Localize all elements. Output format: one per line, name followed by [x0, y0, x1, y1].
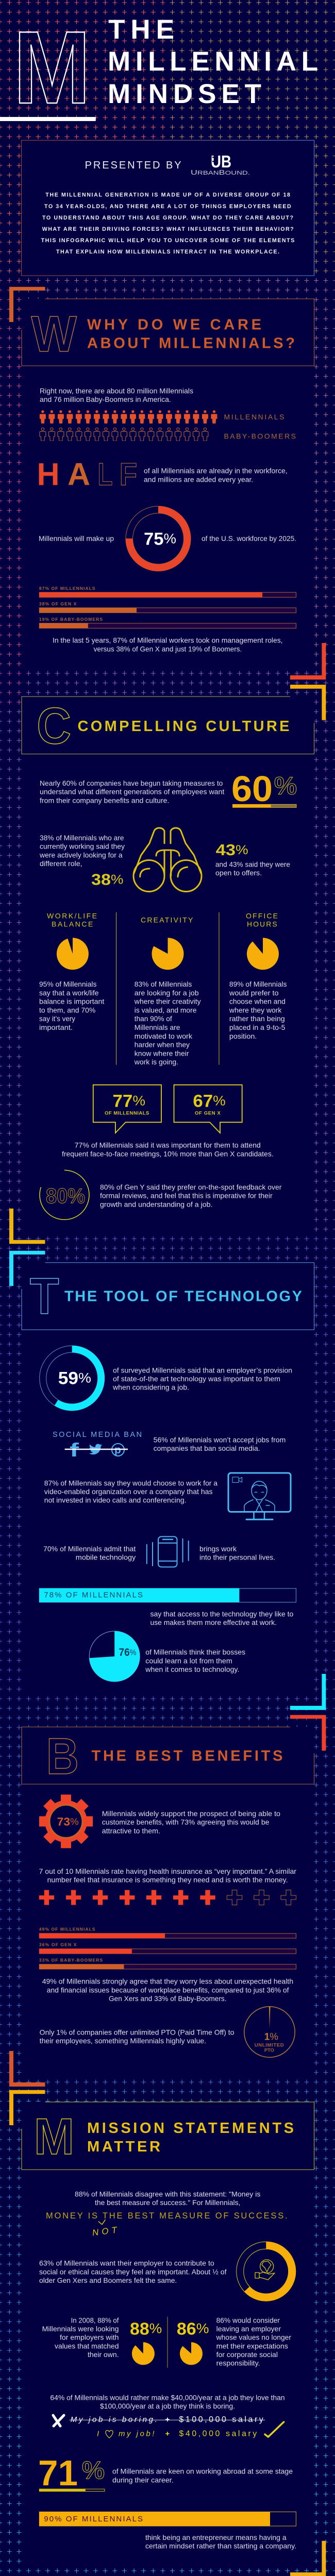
- icon: vibrating phone: [147, 1536, 189, 1567]
- bar chart: worry less: 36% OF GEN X: [39, 1942, 77, 1947]
- text: worry less: and financial issues because of workplace benefits, compared to just 36% of: [47, 1986, 289, 1994]
- section heading: [87, 2120, 294, 2155]
- pie chart: 1% unlimited PTO: 1%: [264, 2031, 278, 2042]
- panel: the tool of technology: [9, 1251, 326, 1710]
- pictogram: millennials row: [40, 410, 217, 423]
- intro paragraph: THE MILLENNIAL GENERATION IS MADE UP OF A DIVERSE GROUP OF 18: [45, 192, 290, 198]
- section frame: [22, 697, 314, 754]
- title outline letter M: M: [13, 10, 91, 125]
- icon group: social media ban: [53, 1431, 142, 1461]
- text: 88% looking for employers: [42, 2316, 119, 2359]
- text: open to offers: [215, 860, 290, 877]
- bar chart: management roles: 87% OF MILLENNIALS: [39, 586, 95, 591]
- label: baby-boomers: BABY-BOOMERS: [224, 432, 296, 440]
- corner bracket bottom left: [9, 2051, 45, 2087]
- corner bracket bottom right: [290, 1674, 326, 1710]
- text: health insurance: 7 out of 10 Millennials rate having health insurance as “very important.” A similar: [39, 1867, 296, 1875]
- stat: 88%: 88: [130, 2319, 149, 2338]
- intro paragraph: [41, 192, 294, 255]
- icon: pinterest: [112, 1444, 124, 1456]
- presented by label: PRESENTED BY: [85, 160, 181, 171]
- handwritten comparison: job you love: I: [97, 2429, 99, 2438]
- bar chart: management roles: 38% OF GEN X: [39, 601, 77, 606]
- column: office hours: HOURS: [247, 920, 277, 928]
- text: bosses: of Millennials think their bosses: [145, 1648, 245, 1656]
- icon: heart: [106, 2430, 113, 2438]
- text: 88% looking for employers: Millennials were looking: [42, 2325, 119, 2333]
- donut chart: 59%: %: [78, 1370, 91, 1386]
- text: social media: [154, 1435, 286, 1452]
- donut chart: 75%: [126, 506, 191, 571]
- section heading: THE BEST BENEFITS: [92, 1748, 282, 1765]
- text: money statement: 88% of Millennials disagree with this statement: "Money is: [75, 2190, 260, 2198]
- text: working abroad: of Millennials are keen on working abroad at some stage: [112, 2467, 293, 2476]
- panel: the best benefits: [9, 1715, 326, 2087]
- panel: mission statements matter: [9, 2090, 326, 2576]
- section heading: ABOUT MILLENNIALS?: [87, 335, 295, 352]
- column: work/life balance: [39, 911, 104, 1031]
- stat: 86%: 86: [177, 2319, 196, 2338]
- text: population numbers: and 76 million Baby-Boomers in America.: [40, 395, 171, 403]
- intro paragraph: TO UNDERSTAND ABOUT THIS AGE GROUP. WHAT DO THEY CARE ABOUT?: [42, 215, 293, 221]
- text: 95% of millennials: to them, and 70%: [39, 1006, 95, 1014]
- column: work/life balance: WORK/LIFE: [47, 911, 97, 920]
- stat: 71%: 71: [38, 2453, 78, 2493]
- text: 38% looking: different role,: [40, 859, 82, 868]
- intro paragraph: WHAT ARE THEIR DRIVING FORCES? WHAT INFLUENCES THEIR BEHAVIOR?: [42, 226, 294, 232]
- text: 89% of millennials: 89% of Millennials: [229, 980, 287, 988]
- stat: 43%: %: [236, 843, 248, 857]
- text: 88% looking for employers: their own.: [88, 2350, 119, 2359]
- text: 86% would consider: responsibility.: [216, 2359, 260, 2367]
- stat: 38%: 38: [91, 871, 109, 889]
- icon: gear with 73%: 73: [57, 1815, 70, 1828]
- text: rather make $40,000: $100,000/year at a job they think is boring.: [100, 2402, 235, 2410]
- text: worry less: [42, 1977, 293, 2003]
- text: social causes: [39, 2259, 227, 2284]
- text: 83% of millennials: [134, 980, 201, 1066]
- corner bracket bottom right: [290, 2541, 326, 2576]
- section initial B: B: [46, 1727, 79, 1785]
- callout: 67% of gen x: %: [213, 1093, 226, 1108]
- text: face-to-face meetings: frequent face-to-face meetings, 10% more than Gen X candidates.: [62, 1149, 274, 1158]
- text: mobile technology left: mobile technology: [76, 1553, 136, 1562]
- icon: white X: [53, 2415, 64, 2426]
- section heading: MISSION STATEMENTS: [87, 2120, 294, 2137]
- text: 89% of millennials: rather than being: [229, 1014, 285, 1023]
- icon: pinterest: p: [114, 1444, 121, 1456]
- text: 89% of millennials: choose when and: [229, 997, 286, 1006]
- text: nearly 60%: understand what different generations of employees want: [40, 788, 224, 796]
- UrbanBound logo: [191, 152, 250, 176]
- column: office hours: OFFICE: [246, 911, 278, 920]
- big word HALF: A: [68, 457, 90, 492]
- section heading: COMPELLING CULTURE: [77, 718, 290, 735]
- text: on-the-spot feedback: [100, 1183, 282, 1208]
- corner bracket top left: [9, 287, 45, 322]
- title underline bar: [0, 117, 96, 121]
- section frame: [22, 299, 314, 366]
- text: 89% of millennials: placed in a 9-to-5: [229, 1023, 286, 1031]
- intro paragraph: TO 34 YEAR-OLDS, AND THERE ARE A LOT OF THINGS EMPLOYERS NEED: [44, 204, 291, 210]
- text: 83% of millennials: than 90% of: [135, 1014, 172, 1023]
- text: 89% of millennials: [229, 980, 287, 1040]
- text: 89% of millennials: would prefer to: [229, 989, 279, 997]
- progress bar: 78% of millennials: [39, 1588, 296, 1602]
- progress bar: 90% of millennials: 90% OF MILLENNIALS: [44, 2515, 143, 2523]
- text: access to technology: [150, 1609, 294, 1626]
- pie chart: 76%: [89, 1631, 140, 1682]
- icon group: social media ban: SOCIAL MEDIA BAN: [53, 1431, 142, 1439]
- quote: money is not the best measure: [46, 2211, 288, 2238]
- callout: 77% of millennials: %: [132, 1093, 145, 1108]
- chart: 80% ring: [40, 1170, 89, 1219]
- text: money statement: the best measure of success." For Millennials,: [95, 2198, 240, 2207]
- text: nearly 60%: [40, 779, 224, 804]
- text: half of millennials: and millions are added every year.: [144, 475, 253, 483]
- text: working abroad: [112, 2467, 293, 2484]
- text: video-enabled: video-enabled organization over a company that has: [44, 1487, 213, 1496]
- callout: 77% of millennials: OF MILLENNIALS: [105, 1110, 149, 1116]
- text: state-of-the-art technology: when considering a job.: [112, 1383, 189, 1392]
- callout: 67% of gen x: OF GEN X: [195, 1110, 221, 1116]
- text: nearly 60%: Nearly 60% of companies have begun taking measures to: [40, 779, 223, 787]
- text: rather make $40,000: 64% of Millennials would rather make $40,000/year at a job they love than: [50, 2393, 285, 2401]
- icon: facebook: f: [70, 1439, 79, 1461]
- pie chart: 83%: [152, 938, 183, 970]
- text: mobile technology right: into their personal lives.: [199, 1553, 275, 1562]
- stat: 86%: %: [196, 2321, 209, 2336]
- column: office hours: [229, 911, 287, 1040]
- section frame: [22, 1263, 314, 1330]
- stat: 38%: %: [111, 873, 124, 887]
- text: on-the-spot feedback: 80% of Gen Y said they prefer on-the-spot feedback over: [100, 1183, 282, 1191]
- text: half of millennials: of all Millennials are already in the workforce,: [144, 467, 288, 475]
- pie chart: 95%: [57, 938, 89, 970]
- big word HALF: L: [98, 457, 112, 492]
- icon: globe in hand: [255, 2260, 275, 2280]
- text: social media: companies that ban social media.: [154, 1444, 260, 1452]
- callout: 67% of gen x: [174, 1085, 242, 1133]
- text: social media: 56% of Millennials won’t accept jobs from: [154, 1435, 286, 1444]
- big word HALF: H: [37, 457, 60, 492]
- handwritten comparison: boring job: [53, 2415, 265, 2426]
- text: 86% would consider: met their expectations: [216, 2342, 288, 2350]
- callout: 67% of gen x: 67: [193, 1091, 212, 1111]
- callout: 77% of millennials: 77: [112, 1091, 132, 1111]
- corner bracket top right: [290, 1715, 326, 1751]
- text: 83% of millennials: work is going.: [134, 1058, 178, 1066]
- text: 38% looking: [39, 834, 125, 868]
- donut chart: 63% with globe in hand: [237, 2242, 296, 2301]
- icon: video call monitor: [228, 1473, 291, 1519]
- donut chart: 59%: [40, 1346, 105, 1411]
- pie chart: 1% unlimited PTO: [244, 2007, 295, 2057]
- intro paragraph: THAT EXPLAIN HOW MILLENNIALS INTERACT IN THE WORKPLACE.: [56, 249, 279, 255]
- handwritten comparison: job you love: [97, 2422, 284, 2438]
- section initial W: W: [31, 306, 77, 363]
- text: money statement: [75, 2190, 260, 2207]
- text: social causes: older Gen Xers and Boomers felt the same.: [39, 2276, 177, 2284]
- text: health insurance: number feel that insurance is something they need and is worth the money.: [47, 1876, 288, 1884]
- UrbanBound logo: UB: [211, 152, 231, 171]
- text: 38% looking: 38% of Millennials who are: [40, 834, 124, 842]
- text: 95% of millennials: important.: [39, 1023, 73, 1031]
- section initial C: C: [37, 698, 71, 755]
- section heading: THE TOOL OF TECHNOLOGY: [64, 1289, 302, 1305]
- text: 86% would consider: [216, 2316, 291, 2367]
- stat: 60%: 60: [231, 769, 273, 809]
- stat: 60%: %: [274, 773, 297, 800]
- text: mobile technology right: [199, 1545, 275, 1562]
- text: 95% of millennials: say that a work/life: [39, 989, 99, 997]
- bar chart: worry less: 33% OF BABY-BOOMERS: [39, 1958, 103, 1963]
- text: nearly 60%: from their company benefits and culture.: [40, 796, 169, 804]
- text: face-to-face meetings: 77% of Millennials said it was important for them to attend: [75, 1141, 261, 1149]
- bar chart: management roles: 19% OF BABY-BOOMERS: [39, 617, 103, 622]
- text: 83% of millennials: know where their: [135, 1049, 189, 1057]
- panel: why do we care about millennials: [9, 287, 326, 680]
- text: 86% would consider: 86% would consider: [216, 2316, 280, 2324]
- quote: money is not the best measure: MONEY IS THE BEST MEASURE OF SUCCESS.: [46, 2211, 288, 2221]
- text: management roles: [53, 636, 282, 653]
- text: bosses: [145, 1648, 245, 1673]
- text: 83% of millennials: where their creativity: [134, 997, 201, 1006]
- text: population numbers: Right now, there are about 80 million Millennials: [40, 386, 193, 395]
- stat: 88%: %: [149, 2321, 162, 2336]
- text: 83% of millennials: are looking for a job: [135, 989, 199, 997]
- divider: [167, 2317, 168, 2368]
- title block: [0, 10, 318, 125]
- section heading: MATTER: [87, 2139, 160, 2155]
- bar chart: worry less: [39, 1927, 296, 1969]
- label: millennials: MILLENNIALS: [224, 413, 284, 421]
- text: access to technology: say that access to the technology they like to: [150, 1609, 294, 1618]
- handwritten comparison: boring job: +: [165, 2415, 170, 2424]
- text: 88% looking for employers: In 2008, 88% of: [71, 2316, 119, 2324]
- stat: 71%: [38, 2453, 105, 2493]
- callout: 77% of millennials: [93, 1085, 161, 1133]
- panel: compelling culture: [9, 685, 326, 1244]
- UrbanBound logo: U RBAN B OUND.: [191, 168, 250, 176]
- handwritten comparison: job you love: my job!: [119, 2429, 155, 2438]
- section initial M: M: [34, 2109, 74, 2165]
- text: open to offers: open to offers.: [215, 869, 262, 877]
- strike line: [65, 1449, 128, 1450]
- big word HALF: [37, 457, 137, 492]
- pie chart: 86%: [180, 2342, 203, 2365]
- text: access to technology: use makes them more effective at work.: [150, 1618, 277, 1626]
- pie chart: 76%: %: [130, 1649, 136, 1657]
- corner bracket bottom right: [290, 643, 326, 680]
- text: entrepreneur: [145, 2533, 296, 2550]
- bar chart: management roles: [39, 586, 296, 628]
- text: entrepreneur: certain mindset rather than starting a company.: [145, 2542, 296, 2550]
- donut chart: 59%: 59: [58, 1369, 78, 1388]
- text: on-the-spot feedback: growth and understanding of a job.: [100, 1200, 212, 1208]
- text: unlimited PTO: their employees, something Millennials highly value.: [40, 2037, 206, 2045]
- text: social causes: 63% of Millennials want their employer to contribute to: [39, 2259, 214, 2267]
- section heading: [87, 316, 295, 352]
- text: 86% would consider: for corporate social: [216, 2350, 278, 2359]
- section frame: [22, 2102, 314, 2170]
- pie chart: 89%: [247, 938, 279, 970]
- text: 86% would consider: whose values no longer: [216, 2333, 291, 2342]
- column: creativity: CREATIVITY: [141, 916, 193, 924]
- text: of the US workforce: of the U.S. workforce by 2025.: [202, 534, 296, 543]
- text: state-of-the-art technology: [112, 1366, 292, 1392]
- text: 83% of millennials: Millennials are: [135, 1023, 180, 1031]
- text: video-enabled: not invested in video calls and conferencing.: [44, 1496, 187, 1504]
- handwritten comparison: job you love: +: [165, 2429, 170, 2438]
- handwritten comparison: boring job: My job is boring.: [71, 2415, 157, 2424]
- text: unlimited PTO: [40, 2028, 234, 2045]
- column: work/life balance: BALANCE: [52, 920, 93, 928]
- text: worry less: 49% of Millennials strongly agree that they worry less about unexpected health: [42, 1977, 293, 1986]
- icon: gear with 73%: %: [70, 1817, 79, 1827]
- text: 89% of millennials: where they work: [229, 1006, 282, 1014]
- pictogram: baby-boomers row: [40, 428, 208, 441]
- text: worry less: Gen Xers and 33% of Baby-Boomers.: [109, 1994, 227, 2003]
- text: management roles: In the last 5 years, 87% of Millennial workers took on management roles,: [53, 636, 282, 645]
- intro paragraph: THIS INFOGRAPHIC WILL HELP YOU TO UNCOVER SOME OF THE ELEMENTS: [41, 238, 294, 244]
- text: 89% of millennials: position.: [229, 1032, 257, 1040]
- pictogram: 7 of 10 medical crosses: [39, 1890, 296, 1905]
- text: mobile technology left: [43, 1545, 136, 1562]
- stat: 43%: 43: [216, 841, 233, 859]
- text: mobile technology left: 70% of Millennials admit that: [43, 1545, 136, 1553]
- title: Mindset: MINDSET: [108, 79, 261, 109]
- quote: money is not the best measure: NOT: [92, 2225, 118, 2238]
- text: millennials will make up: Millennials will make up: [39, 534, 114, 543]
- text: 83% of millennials: is valued, and more: [135, 1006, 197, 1014]
- text: open to offers: and 43% said they were: [215, 860, 290, 868]
- title: The: THE: [108, 14, 174, 45]
- text: health insurance: [39, 1867, 296, 1884]
- text: video-enabled: [44, 1479, 217, 1504]
- text: social causes: social or ethical causes they feel are important. About ½ of: [39, 2267, 227, 2276]
- text: bosses: when it comes to technology.: [145, 1665, 239, 1673]
- text: 83% of millennials: 83% of Millennials: [135, 980, 192, 988]
- text: working abroad: during their career.: [112, 2476, 174, 2484]
- corner bracket bottom left: [9, 1209, 45, 1244]
- section heading: WHY DO WE CARE: [87, 316, 261, 333]
- chart: 80% ring: 80%: [46, 1184, 85, 1208]
- text: on-the-spot feedback: formal reviews, and feel that this is imperative for their: [100, 1192, 273, 1200]
- text: customize benefits: Millennials widely support the prospect of being able to: [102, 1809, 280, 1818]
- handwritten comparison: boring job: $100,000 salary: [179, 2415, 263, 2424]
- section initial T: T: [30, 1268, 59, 1325]
- text: bosses: could learn a lot from them: [145, 1656, 232, 1665]
- text: customize benefits: attractive to them.: [102, 1826, 160, 1835]
- icon: binoculars: [133, 828, 202, 891]
- text: entrepreneur: think being an entrepreneur means having a: [145, 2533, 287, 2541]
- bar chart: worry less: 49% OF MILLENNIALS: [39, 1927, 95, 1932]
- text: unlimited PTO: Only 1% of companies offer unlimited PTO (Paid Time Off) to: [40, 2028, 234, 2036]
- stat: 60%: [231, 769, 297, 809]
- panel: intro box: [22, 140, 314, 276]
- big word HALF: F: [120, 457, 137, 492]
- text: video-enabled: 87% of Millennials say they would choose to work for a: [44, 1479, 217, 1487]
- text: 88% looking for employers: values that matched: [55, 2342, 119, 2350]
- text: half of millennials: [144, 467, 288, 483]
- progress bar: 90% of millennials: [39, 2512, 296, 2526]
- icon: check mark: [265, 2422, 284, 2437]
- pie chart: 76%: 76: [119, 1647, 131, 1658]
- stat: 71%: %: [82, 2457, 105, 2484]
- text: population numbers: [40, 386, 193, 403]
- text: 86% would consider: leaving an employer: [216, 2325, 281, 2333]
- text: state-of-the-art technology: of surveyed Millennials said that an employer’s provision: [113, 1366, 292, 1374]
- text: face-to-face meetings: [62, 1141, 274, 1158]
- title: Millennial: MILLENNIAL: [108, 46, 318, 77]
- corner bracket top left: [9, 1251, 45, 1286]
- text: 83% of millennials: harder when they: [135, 1041, 190, 1049]
- text: 95% of millennials: say it’s very: [39, 1014, 75, 1023]
- text: 95% of millennials: 95% of Millennials: [39, 980, 96, 988]
- text: 38% looking: were actively looking for a: [39, 851, 123, 859]
- column: creativity: [116, 912, 219, 1066]
- text: state-of-the-art technology: of state-of-the art technology was important to them: [113, 1375, 280, 1383]
- donut chart: 75%: %: [164, 531, 176, 547]
- text: 95% of millennials: balance is important: [39, 997, 104, 1006]
- text: 38% looking: currently working said they: [40, 842, 125, 851]
- corner bracket top right: [290, 685, 326, 720]
- text: 88% looking for employers: for employers with: [60, 2333, 119, 2342]
- handwritten comparison: job you love: $40,000 salary: [179, 2429, 257, 2438]
- text: 83% of millennials: motivated to work: [135, 1032, 193, 1040]
- icon: twitter bird: [89, 1444, 102, 1454]
- text: mobile technology right: brings work: [199, 1545, 237, 1553]
- text: 95% of millennials: [39, 980, 104, 1031]
- icon: gear with 73%: [39, 1794, 93, 1848]
- pie chart: 1% unlimited PTO: PTO: [264, 2047, 274, 2053]
- donut chart: 75%: 75: [144, 530, 163, 549]
- section frame: [22, 1727, 314, 1784]
- text: management roles: versus 38% of Gen X and just 19% of Boomers.: [94, 645, 242, 653]
- pie chart: 1% unlimited PTO: UNLIMITED: [255, 2043, 284, 2048]
- text: rather make $40,000: [50, 2393, 285, 2410]
- pie chart: 88%: [132, 2342, 155, 2365]
- text: customize benefits: customize benefits, with 73% agreeing this would be: [102, 1818, 270, 1826]
- text: customize benefits: [102, 1809, 280, 1835]
- corner bracket top left: [9, 2090, 45, 2125]
- progress bar: 78% of millennials: 78% OF MILLENNIALS: [44, 1591, 143, 1600]
